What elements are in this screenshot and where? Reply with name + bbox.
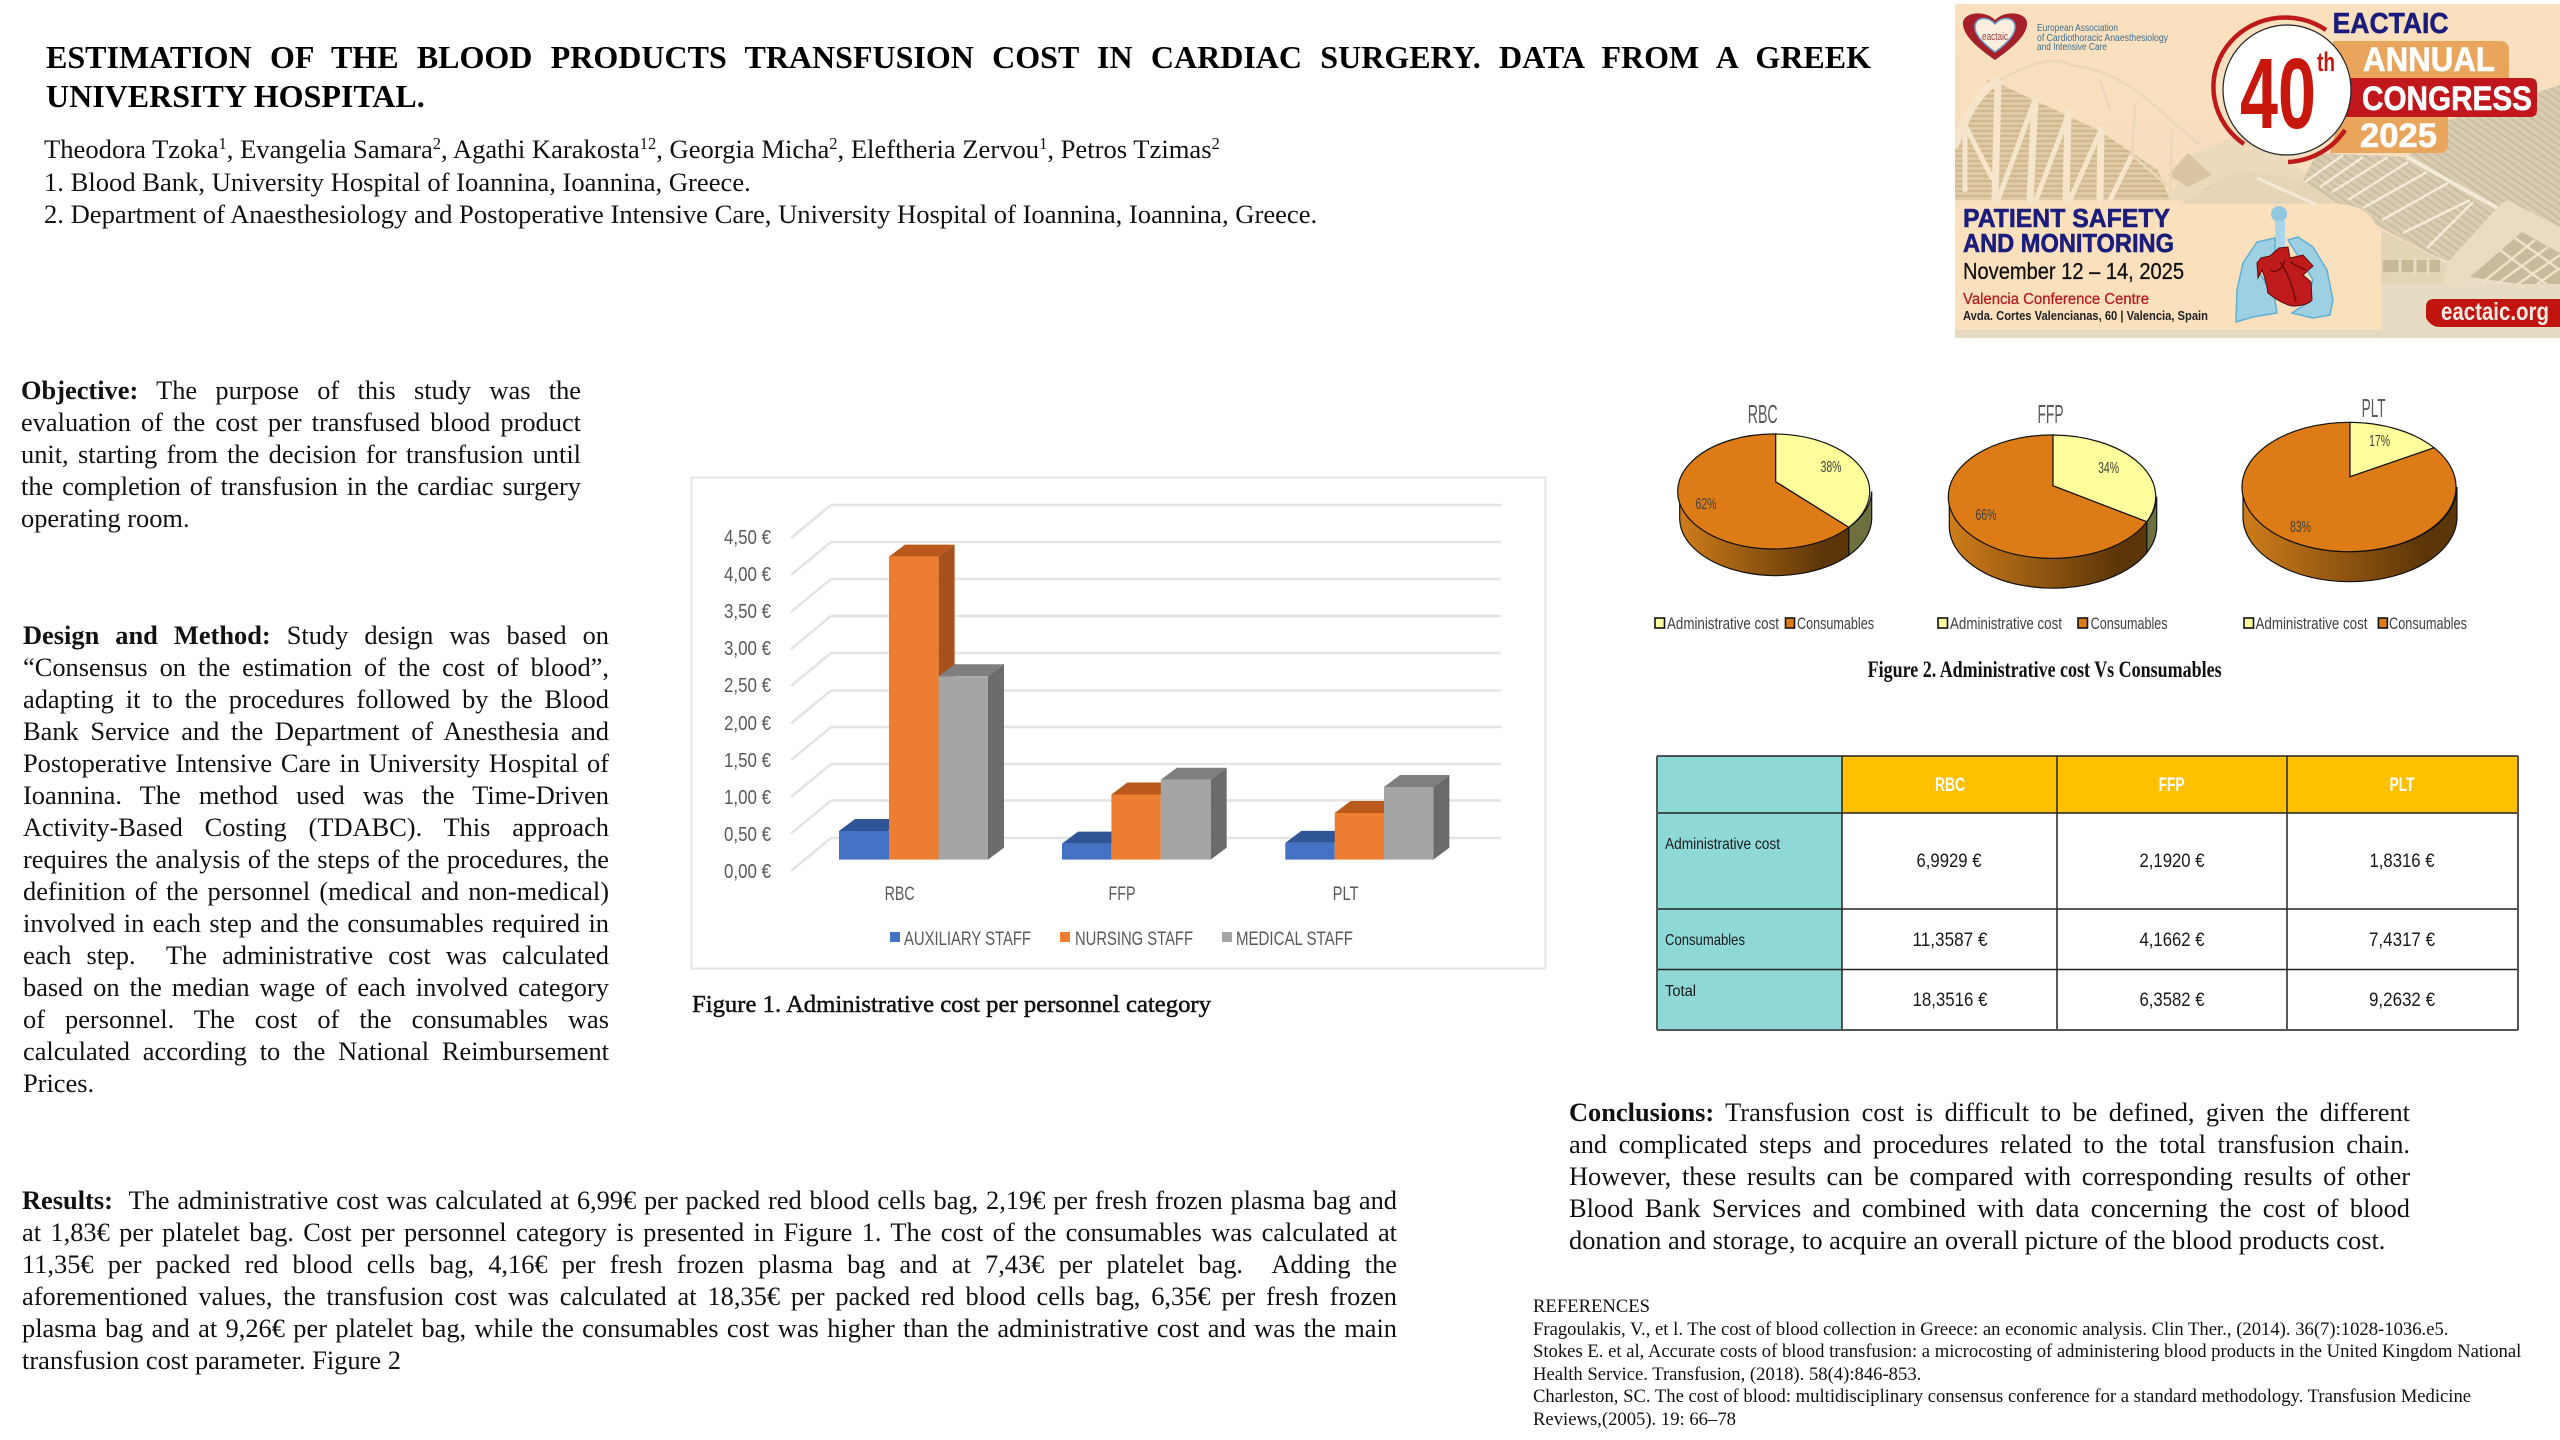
design and method text: adapting it to the procedures followed by the Blood: [23, 684, 609, 714]
congress bands: 2025: [2360, 117, 2437, 155]
table values: 9,2632 €: [2369, 989, 2435, 1011]
EACTAIC logo: of Cardiothoracic Anaesthesiology: [2037, 32, 2169, 44]
design and method text: “Consensus on the estimation of the cost of blood”,: [23, 652, 609, 682]
pie percentage labels: 66%: [1976, 507, 1996, 524]
banner theme text: November 12 – 14, 2025: [1963, 258, 2184, 284]
banner theme text: Avda. Cortes Valencianas, 60 | Valencia, Spain: [1963, 308, 2208, 323]
figure 1 caption: Figure 1. Administrative cost per personnel category: [692, 991, 1211, 1018]
pie: FFP: [1948, 435, 2157, 588]
references: Reviews,(2005). 19: 66–78: [1533, 1409, 1736, 1430]
pie legends: Administrative cost: [2256, 614, 2368, 633]
icon: heart and lungs: [2236, 206, 2333, 322]
authors and affiliations: 2. Department of Anaesthesiology and Postoperative Intensive Care, University Hospital of Ioannina, Ioannina, Greece.: [44, 199, 1317, 229]
table row labels: Total: [1665, 983, 1696, 1000]
design and method text: of personnel. The cost of the consumables was: [23, 1004, 609, 1034]
y axis labels: 3,00 €: [724, 638, 771, 660]
design and method text: Design and Method: Study design was based on: [23, 620, 609, 650]
FFP bars: [1062, 768, 1227, 860]
conclusions text: Conclusions: Transfusion cost is difficult to be defined, given the different: [1569, 1097, 2410, 1127]
pie percentage labels: [1696, 433, 2390, 536]
conclusions text: [1569, 1097, 2410, 1255]
pie titles: PLT: [2362, 393, 2386, 423]
table values: 18,3516 €: [1912, 989, 1988, 1011]
references: Fragoulakis, V., et l. The cost of blood collection in Greece: an economic analysis. Clin Ther., (2014). 36(7):1028-1036.e5.: [1533, 1319, 2448, 1340]
congress banner: [1955, 4, 2560, 338]
authors and affiliations: 1. Blood Bank, University Hospital of Ioannina, Ioannina, Greece.: [44, 167, 751, 197]
objective text: Objective: The purpose of this study was the: [21, 375, 581, 405]
objective text: the completion of transfusion in the cardiac surgery: [21, 471, 581, 501]
results text: at 1,83€ per platelet bag. Cost per personnel category is presented in Figure 1. The cost of the consumables was calculated at: [22, 1217, 1397, 1247]
pie titles: [1748, 393, 2386, 429]
pie titles: FFP: [2038, 399, 2064, 429]
design and method text: definition of the personnel (medical and non-medical): [23, 876, 609, 906]
y axis labels: 0,50 €: [724, 824, 771, 846]
authors and affiliations: [44, 134, 1317, 229]
y axis labels: 1,00 €: [724, 787, 771, 809]
references: [1533, 1296, 2521, 1430]
results text: 11,35€ per packed red blood cells bag, 4,16€ per fresh frozen plasma bag and at 7,43€ per platelet bag. Adding the: [22, 1249, 1397, 1279]
objective text: unit, starting from the decision for transfusion until: [21, 439, 581, 469]
conclusions text: donation and storage, to acquire an overall picture of the blood products cost.: [1569, 1225, 2385, 1255]
banner theme text: Valencia Conference Centre: [1963, 291, 2149, 308]
design and method text: Bank Service and the Department of Anesthesia and: [23, 716, 609, 746]
references: REFERENCES: [1533, 1296, 1650, 1317]
design and method text: each step. The administrative cost was calculated: [23, 940, 609, 970]
table values: 11,3587 €: [1912, 929, 1988, 951]
results text: aforementioned values, the transfusion cost was calculated at 18,35€ per packed red blood cells bag, 6,35€ per fresh frozen: [22, 1281, 1397, 1311]
bar legend: MEDICAL STAFF: [1236, 929, 1353, 950]
title: UNIVERSITY HOSPITAL.: [46, 78, 425, 114]
40th circle badge: 40: [2240, 38, 2316, 150]
EACTAIC logo: and Intensive Care: [2037, 41, 2107, 53]
EACTAIC logo: [1963, 13, 2169, 60]
pie percentage labels: 83%: [2290, 519, 2311, 536]
bar chart: administrative cost per personnel category: [690, 476, 1546, 970]
EACTAIC heading: EACTAIC: [2333, 8, 2449, 40]
table header row: RBC: [1935, 775, 1965, 796]
table values: 6,3582 €: [2140, 989, 2205, 1011]
PLT bars: [1285, 775, 1449, 860]
pie titles: RBC: [1748, 399, 1778, 429]
banner theme text: [1963, 203, 2208, 323]
table values: [1912, 850, 2435, 1011]
RBC bars: [839, 545, 1004, 860]
table values: 4,1662 €: [2140, 929, 2205, 951]
cost table: [1656, 755, 2519, 1031]
table values: 7,4317 €: [2369, 929, 2435, 951]
y axis labels: 0,00 €: [724, 861, 771, 883]
table header row: FFP: [2159, 775, 2185, 796]
category labels: [885, 884, 1359, 905]
congress bands: [2330, 41, 2537, 155]
pie legends: Consumables: [2091, 614, 2168, 633]
banner lower panel: [1955, 204, 2381, 330]
results text: plasma bag and at 9,26€ per platelet bag, while the consumables cost was higher than the administrative cost and was the main: [22, 1313, 1397, 1343]
conclusions text: and complicated steps and procedures related to the total transfusion chain.: [1569, 1129, 2410, 1159]
design and method text: Activity-Based Costing (TDABC). This approach: [23, 812, 609, 842]
design and method text: based on the median wage of each involved category: [23, 972, 609, 1002]
bar legend: [890, 929, 1353, 950]
design and method text: Postoperative Intensive Care in University Hospital of: [23, 748, 609, 778]
pie percentage labels: 17%: [2369, 433, 2390, 450]
table values: 6,9929 €: [1916, 850, 1982, 872]
table row labels: [1665, 836, 1780, 1000]
objective text: evaluation of the cost per transfused blood product: [21, 407, 581, 437]
banner architecture background: [1955, 61, 2560, 338]
y axis labels: [724, 527, 771, 883]
y axis labels: 2,50 €: [724, 675, 771, 697]
design and method text: Prices.: [23, 1068, 94, 1098]
y axis labels: 4,50 €: [724, 527, 771, 549]
category labels: RBC: [885, 884, 915, 905]
y axis labels: 2,00 €: [724, 713, 771, 735]
congress bands: CONGRESS: [2362, 80, 2532, 118]
title: ESTIMATION OF THE BLOOD PRODUCTS TRANSFUSION COST IN CARDIAC SURGERY. DATA FROM A GREEK: [46, 39, 1871, 75]
design and method text: [23, 620, 610, 1098]
authors and affiliations: Theodora Tzoka1, Evangelia Samara2, Agathi Karakosta12, Georgia Micha2, Eleftheria Zervou1, Petros Tzimas2: [44, 134, 1220, 164]
table row labels: Consumables: [1665, 932, 1745, 949]
objective text: operating room.: [21, 503, 190, 533]
design and method text: Ioannina. The method used was the Time-Driven: [23, 780, 609, 810]
y axis labels: 4,00 €: [724, 564, 771, 586]
table row labels: Administrative cost: [1665, 836, 1780, 853]
40th circle badge: [2213, 17, 2351, 162]
congress bands: ANNUAL: [2363, 41, 2495, 79]
table header row: [1935, 775, 2415, 796]
title: [46, 39, 1871, 114]
table header row: PLT: [2390, 775, 2415, 796]
pie legends: Consumables: [1797, 614, 1874, 633]
pie percentage labels: 34%: [2098, 460, 2119, 477]
category labels: PLT: [1333, 884, 1359, 905]
banner theme text: AND MONITORING: [1963, 228, 2174, 258]
references: Charleston, SC. The cost of blood: multidisciplinary consensus conference for a standard methodology. Transfusion Medicine: [1533, 1386, 2471, 1407]
references: Health Service. Transfusion, (2018). 58(4):846-853.: [1533, 1364, 1921, 1385]
bar legend: NURSING STAFF: [1075, 929, 1193, 950]
design and method text: requires the analysis of the steps of the procedures, the: [23, 844, 609, 874]
table values: 2,1920 €: [2140, 850, 2205, 872]
pie legends: Administrative cost: [1667, 614, 1779, 633]
results text: transfusion cost parameter. Figure 2: [22, 1345, 401, 1375]
conclusions text: However, these results can be compared with corresponding results of other: [1569, 1161, 2410, 1191]
pie: PLT: [2242, 422, 2457, 582]
pie percentage labels: 62%: [1696, 496, 1716, 513]
40th circle badge: th: [2317, 47, 2335, 77]
design and method text: calculated according to the National Reimbursement: [23, 1036, 609, 1066]
references: Stokes E. et al, Accurate costs of blood transfusion: a microcosting of administering blood products in the United Kingdom National: [1533, 1341, 2521, 1362]
pie legends: [1655, 614, 2467, 633]
results text: [22, 1185, 1397, 1375]
pie: RBC: [1678, 434, 1872, 576]
bar legend: AUXILIARY STAFF: [904, 929, 1031, 950]
pie percentage labels: 38%: [1820, 459, 1842, 476]
category labels: FFP: [1108, 884, 1136, 905]
pie legends: Administrative cost: [1950, 614, 2062, 633]
conclusions text: Blood Bank Services and combined with data concerning the cost of blood: [1569, 1193, 2410, 1223]
table values: 1,8316 €: [2370, 850, 2435, 872]
design and method text: involved in each step and the consumables required in: [23, 908, 609, 938]
EACTAIC logo: eactaic: [1982, 31, 2008, 43]
results text: Results: The administrative cost was calculated at 6,99€ per packed red blood cells bag, 2,19€ per fresh frozen plasma bag and: [22, 1185, 1397, 1215]
objective text: [21, 375, 581, 533]
pie charts: administrative cost vs consumables: [1654, 393, 2467, 633]
y axis labels: 3,50 €: [724, 601, 771, 623]
EACTAIC logo: European Association: [2037, 22, 2118, 34]
y axis labels: 1,50 €: [724, 750, 771, 772]
banner theme text: PATIENT SAFETY: [1963, 203, 2170, 233]
